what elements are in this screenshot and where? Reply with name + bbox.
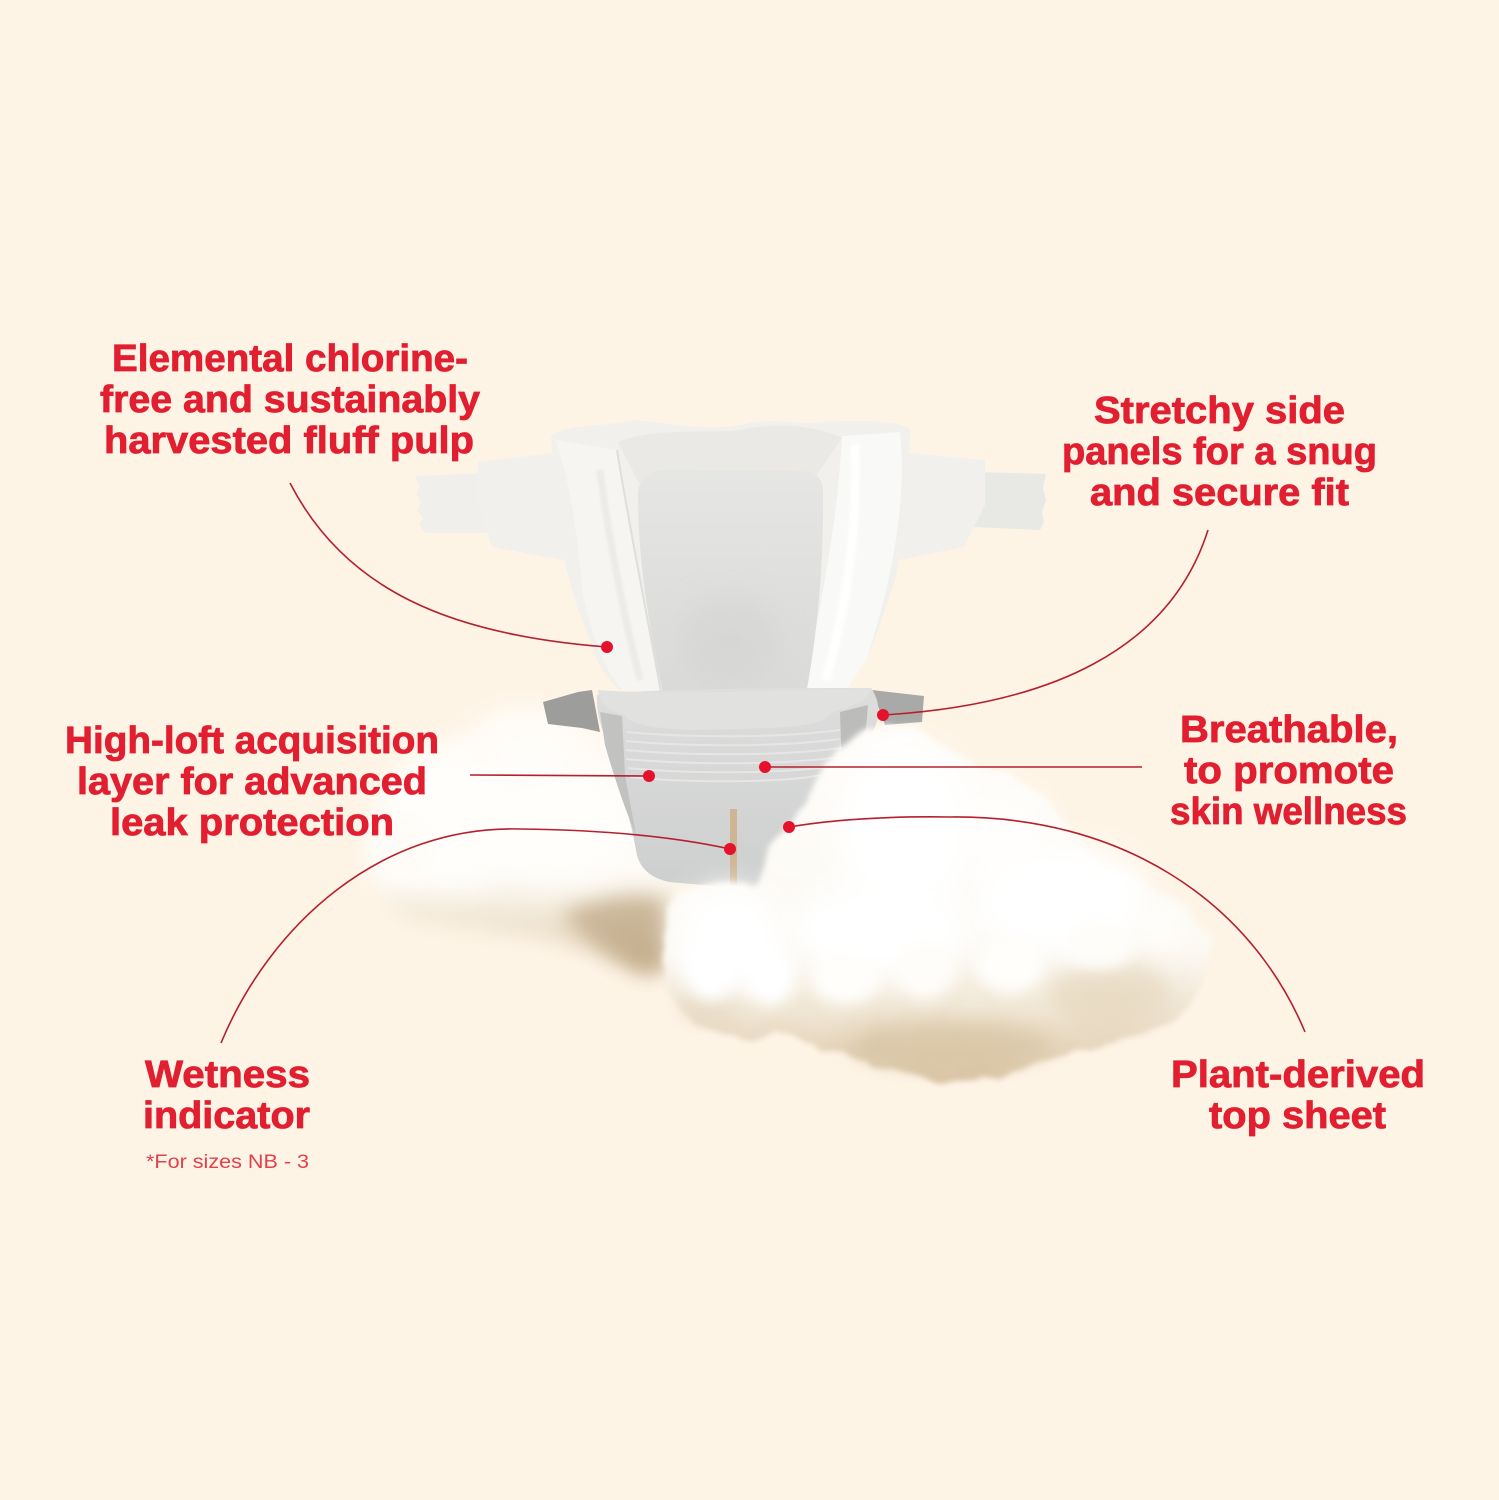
front-right cotton cloud <box>665 725 1211 1083</box>
front ribbing <box>626 730 842 781</box>
label: plant-derived top sheet <box>1171 1054 1425 1137</box>
label: acquisition layer: leak protection <box>110 802 394 844</box>
cotton white puffs <box>675 745 1184 1005</box>
label: plant-derived top sheet: Plant-derived <box>1171 1054 1425 1096</box>
label: fluff pulp: Elemental chlorine- <box>112 338 468 380</box>
label: acquisition layer: layer for advanced <box>77 761 427 803</box>
absorbent core <box>638 470 823 694</box>
dot: top sheet <box>783 821 795 833</box>
dot: side panels <box>877 709 889 721</box>
callout line: side panels <box>883 530 1208 715</box>
back-left cotton cloud <box>367 707 680 975</box>
label: wetness indicator: *For sizes NB - 3 <box>146 1152 309 1173</box>
wetness indicator strip <box>730 809 737 885</box>
label: wetness indicator: Wetness <box>145 1054 310 1096</box>
label: acquisition layer <box>65 720 439 844</box>
diaper inner body <box>478 420 985 690</box>
label: fluff pulp: free and sustainably <box>100 379 480 421</box>
label: wetness indicator: indicator <box>143 1095 310 1137</box>
front body <box>597 688 878 890</box>
diaper illustration <box>415 420 1046 890</box>
right fastening tape <box>972 472 1046 530</box>
right side tab <box>872 690 924 725</box>
cotton tan shadows <box>680 960 1170 1069</box>
label: breathable: Breathable, <box>1180 709 1398 751</box>
front waistband <box>598 688 871 730</box>
label: stretchy side panels: panels for a snug <box>1062 431 1377 473</box>
dot: breathable <box>759 761 771 773</box>
callout line: wetness indicator <box>221 829 730 1043</box>
label: breathable: to promote <box>1184 750 1394 792</box>
callout line: fluff pulp <box>290 483 607 647</box>
label: fluff pulp: harvested fluff pulp <box>104 420 474 462</box>
callout line: breathable <box>765 766 1142 768</box>
label: breathable: skin wellness <box>1170 791 1407 833</box>
label: acquisition layer: High-loft acquisition <box>65 720 439 762</box>
label: stretchy side panels: Stretchy side <box>1094 390 1345 432</box>
left elastic cuff <box>556 440 661 692</box>
dot: acquisition layer <box>643 770 655 782</box>
callout line: top sheet <box>789 817 1305 1032</box>
label: fluff pulp <box>100 338 480 462</box>
ruffled side gathers <box>600 712 636 835</box>
label: breathable <box>1170 709 1407 833</box>
dot: wetness indicator <box>724 843 736 855</box>
inner back shading <box>618 426 842 485</box>
callout line: acquisition layer <box>470 775 649 776</box>
label: wetness indicator <box>143 1054 310 1173</box>
label: plant-derived top sheet: top sheet <box>1209 1095 1386 1137</box>
left fastening tape <box>415 473 490 533</box>
left side tab <box>543 690 600 732</box>
label: stretchy side panels: and secure fit <box>1090 472 1349 514</box>
label: stretchy side panels <box>1062 390 1377 514</box>
dot: fluff pulp <box>601 641 613 653</box>
right elastic cuff <box>804 432 902 690</box>
